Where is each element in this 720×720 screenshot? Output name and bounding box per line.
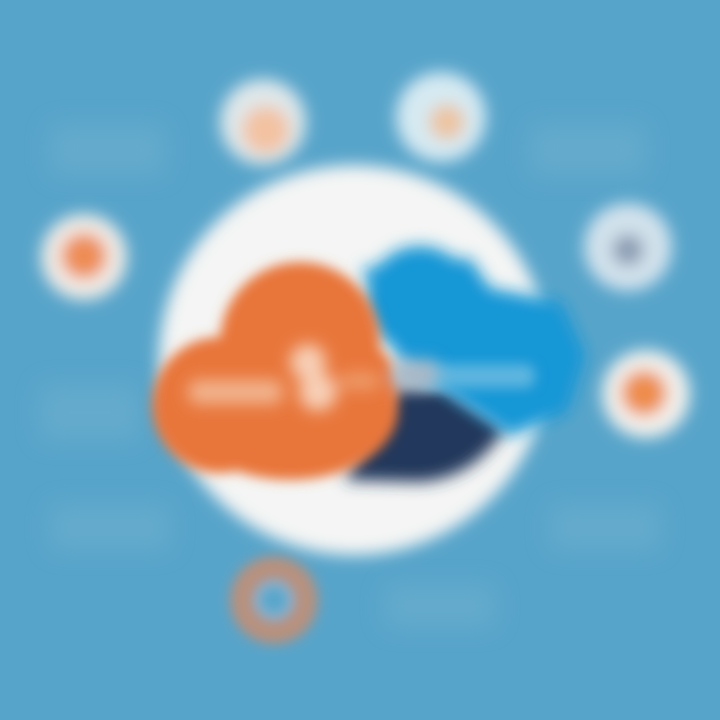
icon: top-right badge <box>396 72 486 162</box>
orange cloud <box>152 262 399 480</box>
faint background panels <box>40 125 660 627</box>
icon: right orange badge <box>602 350 690 438</box>
cloud label blur marks <box>188 344 438 411</box>
central white circle <box>159 165 549 555</box>
blue cloud label band <box>420 364 535 388</box>
icon: right grey badge <box>584 203 672 291</box>
icon: left orange badge <box>41 214 127 300</box>
icon: top-left badge <box>220 79 306 165</box>
navy cloud shadow <box>345 385 505 482</box>
icon: bottom ring <box>242 568 306 632</box>
blue cloud <box>362 246 586 436</box>
